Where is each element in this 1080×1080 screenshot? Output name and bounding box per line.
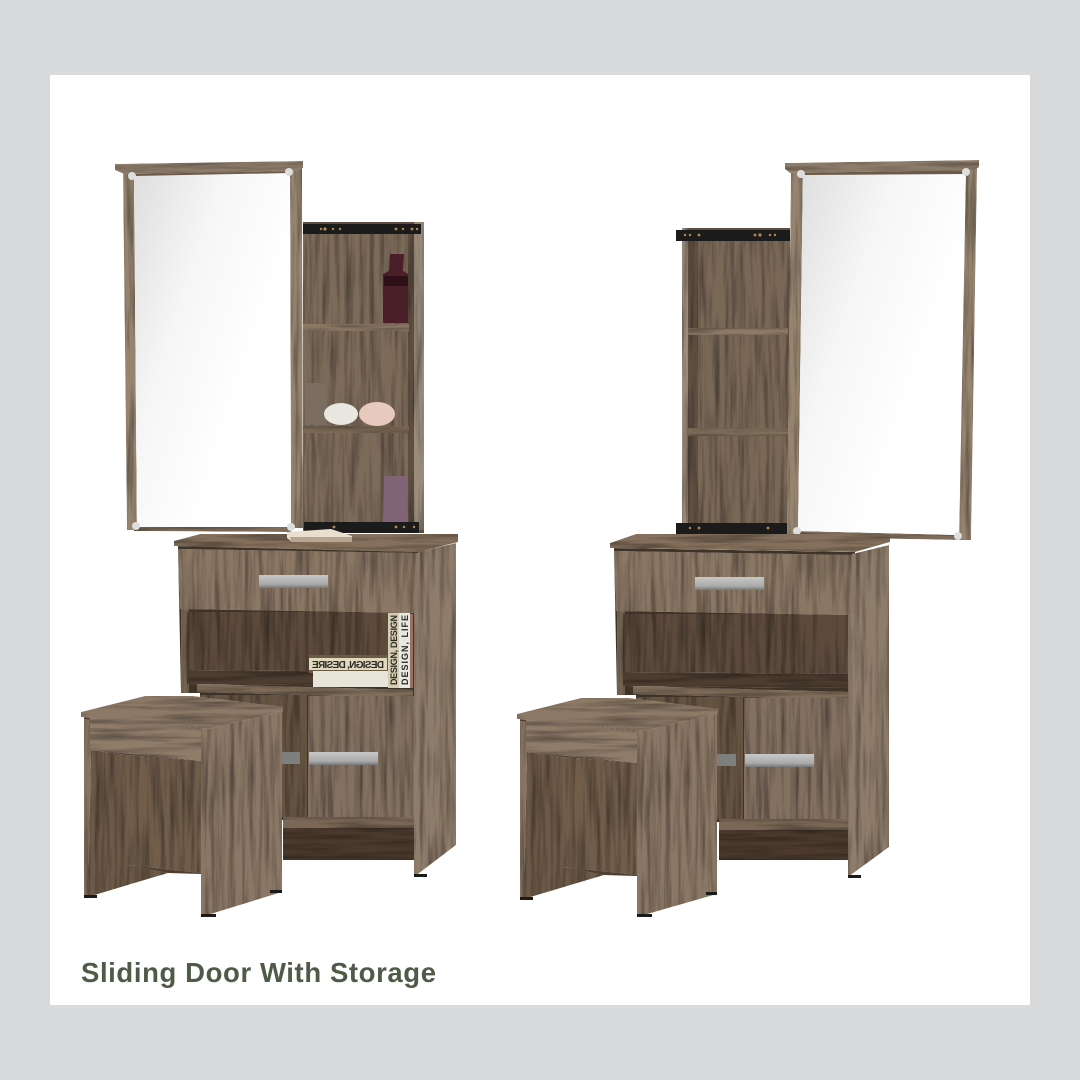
left stool bbox=[81, 696, 283, 917]
white panel bbox=[50, 75, 1030, 1005]
book on table top bbox=[287, 529, 352, 542]
books in cabinet: DESIGN, LIFE bbox=[400, 615, 410, 685]
right mirror glass bbox=[798, 174, 965, 535]
right mirror frame bbox=[785, 160, 979, 540]
left base cabinet bbox=[174, 534, 458, 877]
caption: Sliding Door With Storage bbox=[81, 957, 436, 988]
shelf decor: vases bbox=[305, 254, 408, 522]
left shelf unit bbox=[303, 222, 424, 533]
left mirror glass bbox=[134, 173, 291, 527]
books in cabinet: DESIGN, DESIGN bbox=[389, 615, 399, 685]
right mirror fixing caps bbox=[793, 168, 970, 540]
books in cabinet: DESIGN, DESIRE bbox=[312, 660, 384, 671]
right base cabinet bbox=[610, 534, 890, 878]
books in cabinet bbox=[309, 613, 413, 688]
left mirror frame bbox=[115, 161, 303, 532]
left dressing table: mirror slid left exposing decorated shelves bbox=[81, 161, 458, 917]
right dressing table: mirror slid right exposing empty shelves bbox=[517, 160, 979, 917]
right shelf unit bbox=[676, 228, 790, 534]
left mirror fixing caps bbox=[128, 168, 295, 531]
right stool bbox=[517, 698, 718, 917]
